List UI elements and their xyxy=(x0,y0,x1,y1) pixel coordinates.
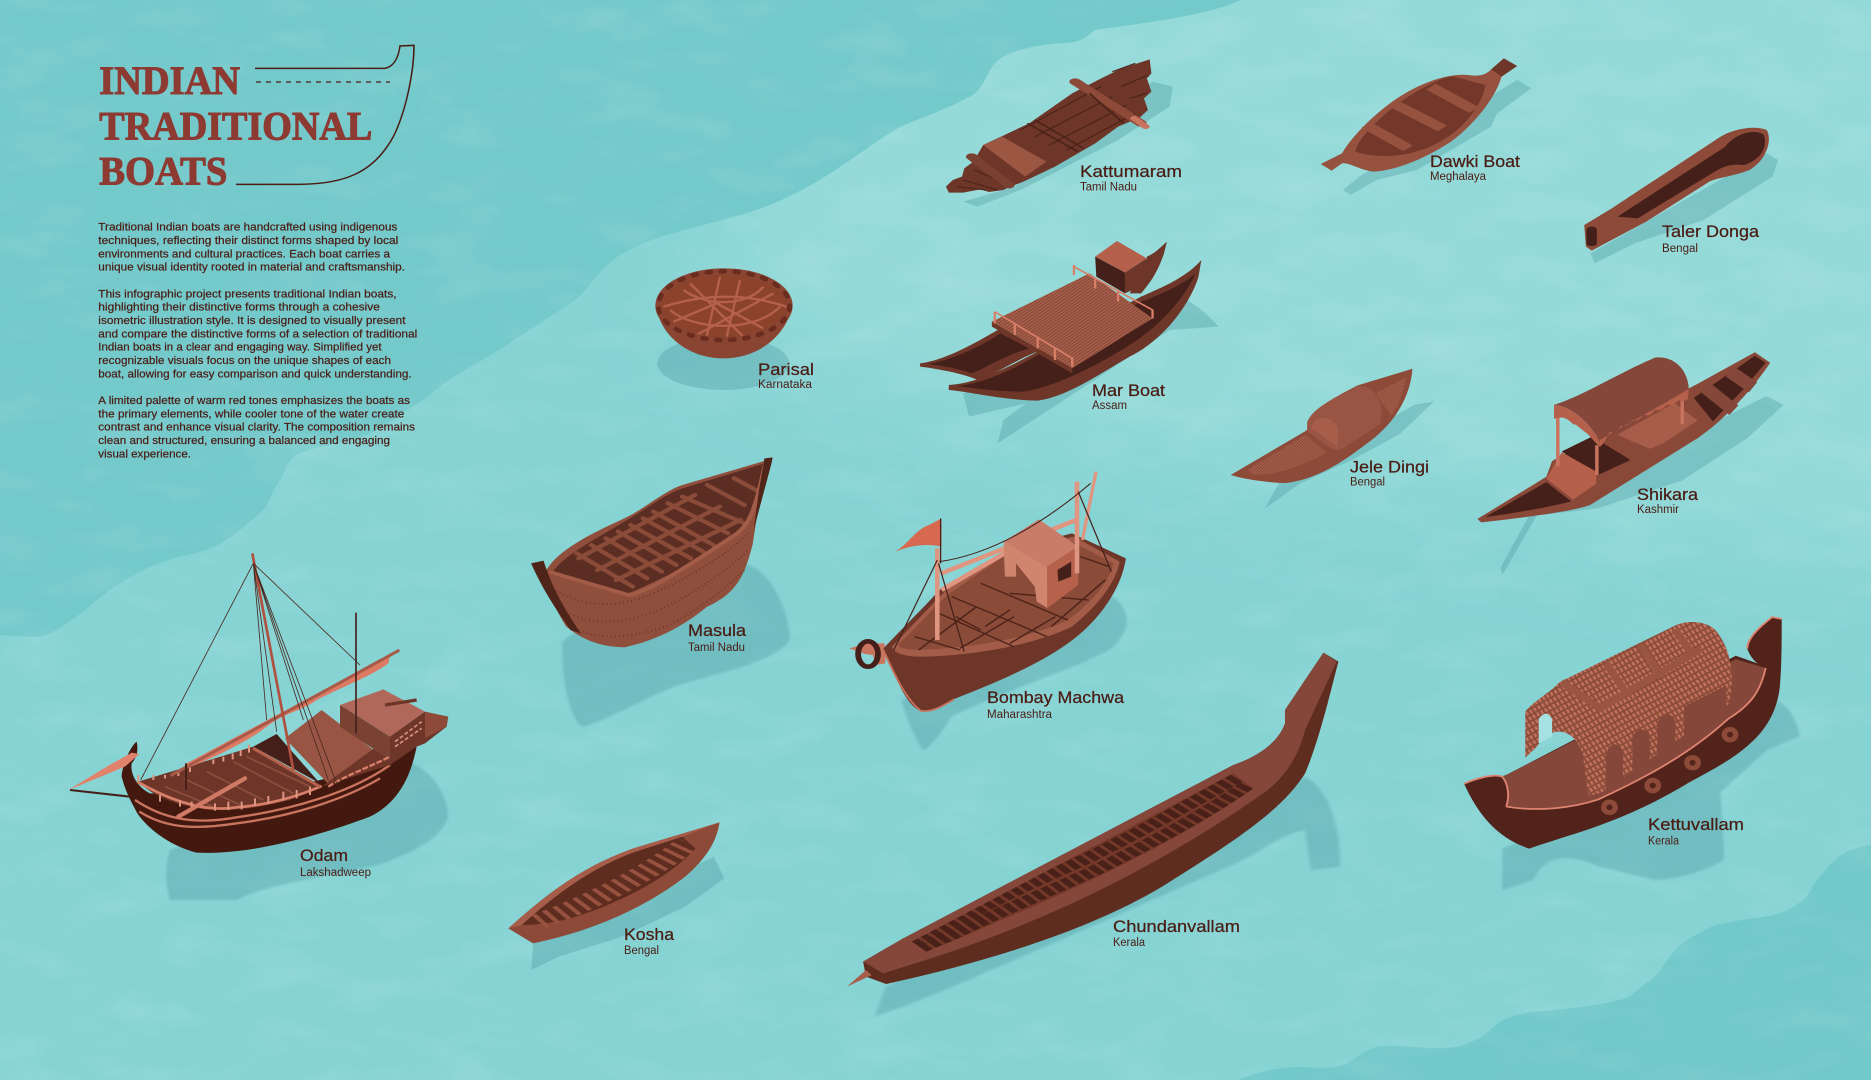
odam masts xyxy=(186,553,356,790)
intro text: isometric illustration style. It is designed to visually present xyxy=(98,315,406,327)
boat: Masula xyxy=(531,457,790,727)
taler hull xyxy=(1584,128,1769,251)
mar name xyxy=(1092,381,1165,412)
kattumaram log lines xyxy=(957,63,1148,190)
shikara bow well xyxy=(1485,482,1571,517)
jele name xyxy=(1350,458,1429,489)
chundan hull xyxy=(863,653,1338,984)
mar name: Mar Boat xyxy=(1092,381,1165,400)
dawki name xyxy=(1430,152,1520,183)
shikara name: Kashmir xyxy=(1637,504,1679,516)
intro text: Indian boats in a clear and engaging way. Simplified yet xyxy=(98,342,382,354)
kettuvallam tyres xyxy=(1604,729,1736,813)
intro text: and compare the distinctive forms of a selection of traditional xyxy=(98,328,417,340)
kattumaram beams xyxy=(1075,82,1141,123)
machwa masts xyxy=(937,482,1077,640)
kettuvallam window xyxy=(1539,714,1552,743)
boat: Chundanvallam xyxy=(847,653,1341,1017)
parisal lattice xyxy=(663,277,787,337)
odam stern body xyxy=(322,727,447,787)
boat: Shikara xyxy=(1477,352,1784,575)
parisal rim xyxy=(658,271,790,340)
jele forward deck xyxy=(1248,435,1326,475)
intro text: environments and cultural practices. Each boat carries a xyxy=(98,248,391,260)
masula stem posts xyxy=(531,457,773,633)
dawki stern dark xyxy=(1491,58,1517,77)
odam hull stripes xyxy=(135,765,390,827)
intro text: recognizable visuals focus on the unique shapes of each xyxy=(98,355,391,367)
mar rails xyxy=(995,265,1153,367)
mar back prow xyxy=(1130,242,1167,293)
kosha hull xyxy=(508,822,720,943)
taler name xyxy=(1662,222,1760,255)
machwa flag xyxy=(894,518,941,552)
machwa shadow xyxy=(902,597,1127,750)
chundan name xyxy=(1113,917,1240,949)
jele shadow xyxy=(1265,401,1434,508)
taler shadow xyxy=(1591,153,1778,263)
shikara shadow xyxy=(1500,396,1784,575)
mar front hull xyxy=(949,260,1201,401)
dawki interior xyxy=(1355,77,1485,156)
masula hull lashing xyxy=(550,533,749,636)
masula hull xyxy=(546,461,765,647)
title block xyxy=(99,45,414,193)
odam stern carving xyxy=(328,757,390,787)
shikara hull xyxy=(1477,352,1770,522)
kattumaram front beam xyxy=(972,157,1009,185)
odam cross beam xyxy=(253,748,320,787)
odam name: Lakshadweep xyxy=(300,867,371,879)
kosha interior xyxy=(522,837,695,925)
boat: Taler Donga xyxy=(1584,128,1778,263)
shikara name: Shikara xyxy=(1637,485,1699,504)
kettuvallam rim xyxy=(1464,617,1782,809)
dawki shadow xyxy=(1343,80,1531,195)
jele hut opening xyxy=(1311,418,1338,447)
odam hull xyxy=(122,742,417,853)
boat: Odam xyxy=(68,553,448,900)
shikara seat block xyxy=(1546,452,1596,500)
kosha shadow xyxy=(531,857,724,970)
shikara stern wells xyxy=(1694,356,1766,421)
boat: Jele Dingi xyxy=(1231,369,1434,508)
kosha name: Bengal xyxy=(624,945,659,957)
parisal name xyxy=(758,360,814,391)
kattumaram platform xyxy=(983,137,1046,177)
masula name: Tamil Nadu xyxy=(688,642,745,654)
masula name: Masula xyxy=(688,621,747,640)
kattumaram name: Kattumaram xyxy=(1080,162,1182,181)
chundan top surface xyxy=(863,653,1337,973)
odam thatched roof xyxy=(285,710,380,784)
intro text: boat, allowing for easy comparison and quick understanding. xyxy=(98,368,412,380)
intro text: highlighting their distinctive forms through a cohesive xyxy=(98,302,380,314)
masula deck xyxy=(552,463,764,593)
odam shadow xyxy=(166,763,448,900)
odam dark hold xyxy=(253,734,320,783)
mar deck xyxy=(992,273,1153,368)
kattumaram beam tip xyxy=(1134,118,1146,127)
pale water glow, upper right xyxy=(700,0,1871,560)
chundan spike xyxy=(847,970,872,987)
machwa name xyxy=(987,688,1125,721)
odam yard xyxy=(172,651,398,775)
odam rail posts xyxy=(138,745,310,811)
kettuvallam shadow xyxy=(1502,701,1800,890)
intro text: clean and structured, ensuring a balanced and engaging xyxy=(98,435,390,447)
darker water region, top left xyxy=(0,0,1241,637)
odam cabin xyxy=(340,689,448,760)
dawki name: Dawki Boat xyxy=(1430,152,1520,171)
mar rear hull xyxy=(920,328,1041,380)
masula shadow xyxy=(562,563,790,727)
odam deck planks xyxy=(165,757,310,807)
odam sail xyxy=(187,654,391,768)
kattumaram name: Tamil Nadu xyxy=(1080,182,1137,194)
machwa deck xyxy=(892,537,1120,657)
title: BOATS xyxy=(99,148,227,193)
shikara canopy xyxy=(1554,357,1689,442)
machwa name: Maharashtra xyxy=(987,709,1053,721)
intro text: visual experience. xyxy=(98,448,191,460)
boat outline around title xyxy=(236,45,414,184)
taler end hole xyxy=(1587,227,1597,246)
parisal name: Karnataka xyxy=(758,379,813,391)
odam gunwale xyxy=(137,782,322,809)
boat: Bombay Machwa xyxy=(849,472,1127,750)
kosha name xyxy=(624,925,675,957)
shikara right valance xyxy=(1600,389,1689,447)
shikara name xyxy=(1637,485,1699,516)
machwa deck planks xyxy=(914,557,1109,650)
odam name: Odam xyxy=(300,846,348,865)
boat: Parisal xyxy=(657,270,814,391)
odam flag xyxy=(68,753,139,797)
kattumaram shadow xyxy=(963,82,1173,207)
kettuvallam name: Kerala xyxy=(1648,836,1680,848)
mar shadow xyxy=(963,300,1219,443)
odam rigging xyxy=(141,563,360,783)
kattumaram ropes xyxy=(1027,93,1124,152)
kettuvallam doors xyxy=(1606,686,1726,791)
taler hollow xyxy=(1618,132,1765,218)
boat: Kettuvallam xyxy=(1464,617,1800,890)
machwa rigging xyxy=(894,483,1111,652)
odam name xyxy=(300,846,371,879)
jele hull xyxy=(1231,369,1412,483)
chundan name: Kerala xyxy=(1113,937,1146,949)
intro text: Traditional Indian boats are handcrafted using indigenous xyxy=(98,222,398,234)
machwa keel highlight xyxy=(883,650,954,711)
boat: Kosha xyxy=(508,822,724,970)
kettuvallam hut xyxy=(1525,622,1732,796)
kettuvallam roof ribs xyxy=(1562,629,1701,708)
dawki name: Meghalaya xyxy=(1430,171,1487,183)
kosha rim xyxy=(508,822,720,928)
machwa life ring xyxy=(858,641,878,667)
masula rim xyxy=(549,463,765,595)
kettuvallam hull xyxy=(1464,617,1782,849)
parisal bowl xyxy=(657,270,792,358)
intro text: techniques, reflecting their distinct forms shaped by local xyxy=(98,235,398,247)
boat: Dawki Boat xyxy=(1321,58,1531,195)
parisal name: Parisal xyxy=(758,360,814,379)
intro text: the primary elements, while cooler tone of the water create xyxy=(98,408,404,420)
darker water region, bottom right xyxy=(1240,845,1871,1080)
shikara cockpit xyxy=(1562,436,1631,475)
kettuvallam name: Kettuvallam xyxy=(1648,815,1744,834)
intro text: unique visual identity rooted in material and craftsmanship. xyxy=(98,262,405,274)
kettuvallam deck xyxy=(1502,659,1766,809)
jele aft deck xyxy=(1376,377,1407,415)
dawki benches xyxy=(1366,87,1474,148)
machwa cabin xyxy=(1004,519,1078,608)
chundan name: Chundanvallam xyxy=(1113,917,1240,936)
shikara front valance xyxy=(1554,405,1600,447)
chundan seats xyxy=(915,777,1248,949)
jele name: Bengal xyxy=(1350,477,1385,489)
title: INDIAN xyxy=(99,58,240,103)
mar name: Assam xyxy=(1092,400,1127,412)
boat: Kattumaram xyxy=(946,59,1182,207)
intro text: This infographic project presents traditional Indian boats, xyxy=(98,288,397,300)
intro text: A limited palette of warm red tones emphasizes the boats as xyxy=(98,395,410,407)
kattumaram logs xyxy=(946,59,1151,193)
chundan seat well xyxy=(912,773,1253,952)
mar cabin xyxy=(1095,241,1147,293)
chundan shadow xyxy=(875,777,1341,1017)
kosha ribs xyxy=(539,843,688,922)
intro text: contrast and enhance visual clarity. The composition remains xyxy=(98,422,415,434)
taler name: Taler Donga xyxy=(1662,222,1760,241)
taler name: Bengal xyxy=(1662,243,1698,255)
machwa hull xyxy=(883,533,1126,710)
title: TRADITIONAL xyxy=(99,103,372,148)
machwa prow xyxy=(849,643,885,665)
masula name xyxy=(688,621,747,654)
parisal interior xyxy=(661,272,787,338)
odam oar xyxy=(178,778,245,817)
machwa name: Bombay Machwa xyxy=(987,688,1125,707)
boat: Mar Boat xyxy=(920,241,1219,443)
shikara posts xyxy=(1558,394,1682,475)
dawki hull xyxy=(1321,58,1517,172)
masula grid xyxy=(577,478,759,587)
kettuvallam name xyxy=(1648,815,1744,848)
parisal shadow xyxy=(657,337,789,390)
jele hut xyxy=(1307,386,1382,450)
odam deck xyxy=(138,747,322,810)
jele name: Jele Dingi xyxy=(1350,458,1429,477)
machwa rails xyxy=(941,520,1076,590)
kosha name: Kosha xyxy=(624,925,675,944)
kattumaram name xyxy=(1080,162,1182,194)
